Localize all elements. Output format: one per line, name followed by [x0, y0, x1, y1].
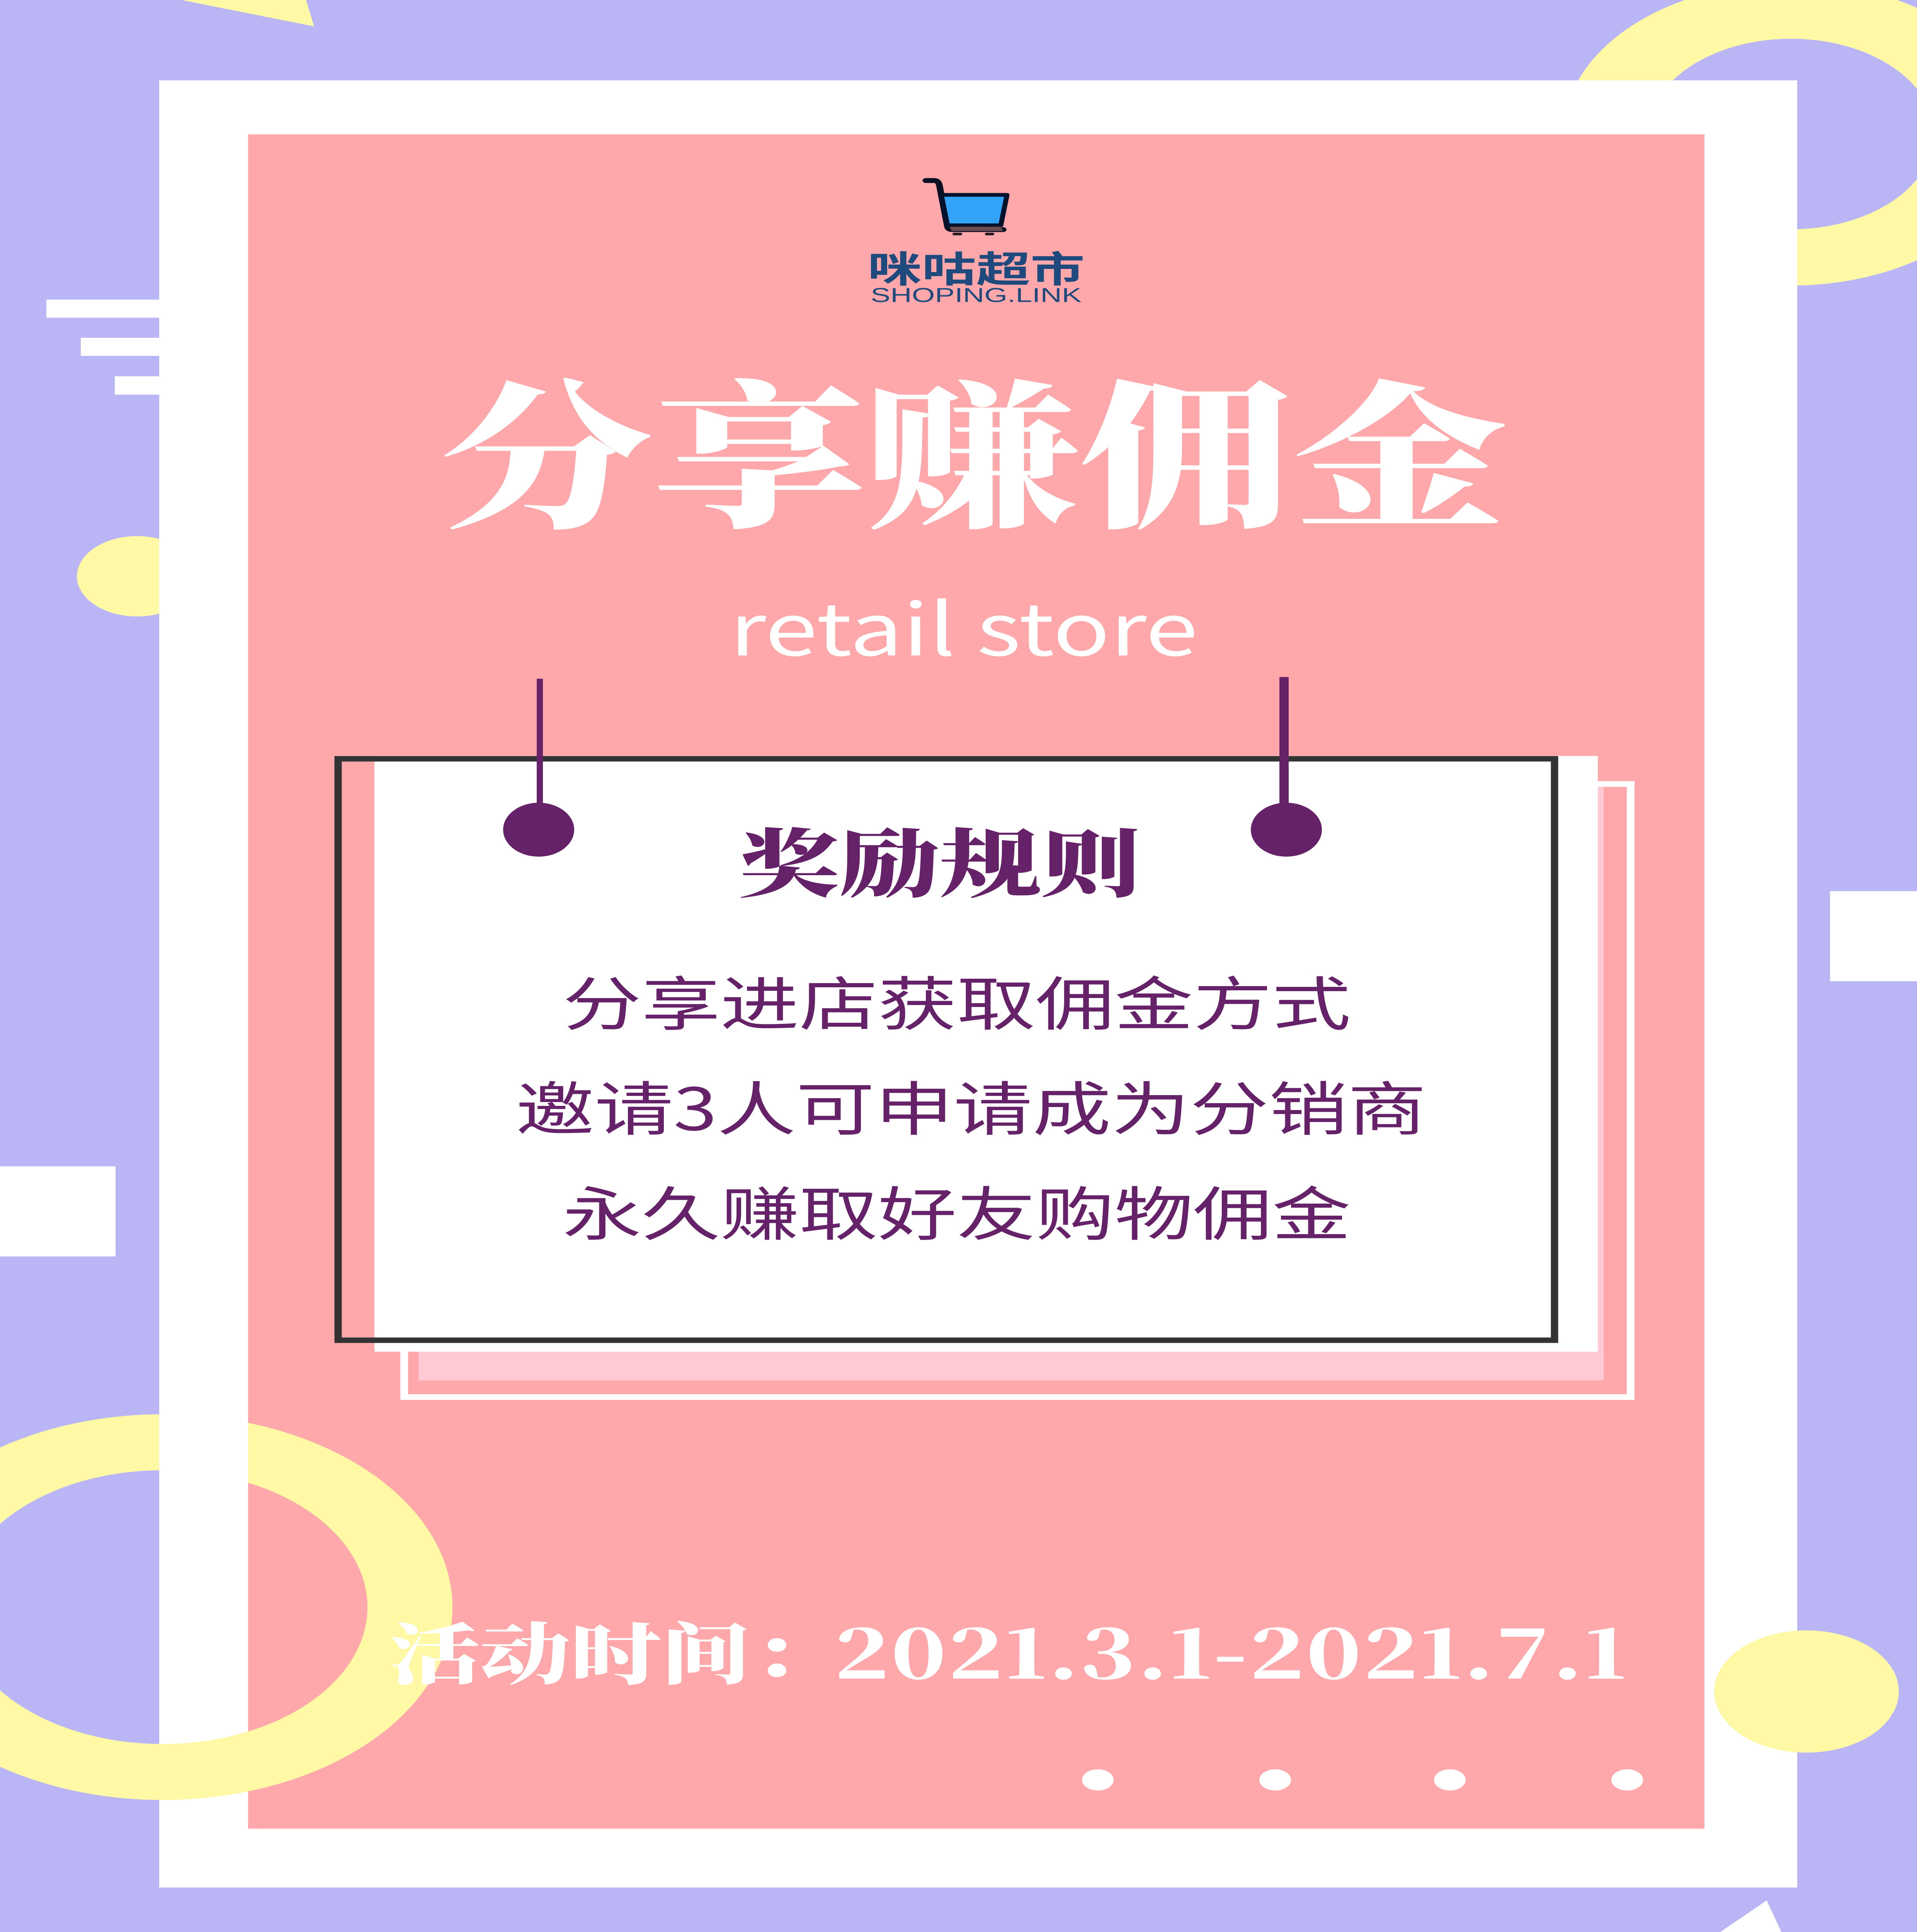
outline back frame	[404, 784, 1631, 1397]
title: 分享赚佣金	[440, 332, 1506, 560]
decoration: bottom-right white triangle	[1720, 1900, 1781, 1932]
decoration: right yellow dot	[1714, 1630, 1899, 1753]
rule line 3: 永久赚取好友购物佣金	[563, 1167, 1351, 1252]
icon: shopping cart	[926, 180, 1007, 235]
dark outline	[338, 759, 1555, 1340]
decoration: right white block	[1830, 891, 1917, 981]
panel: white frame	[159, 80, 1797, 1888]
subtitle: retail store	[730, 573, 1198, 676]
decorative dots	[1082, 1769, 1643, 1791]
decoration: left yellow dot	[77, 536, 197, 616]
logo	[867, 180, 1085, 306]
pin left	[503, 679, 574, 857]
decoration: top-right yellow ring	[1563, 0, 1917, 286]
decoration: left white block	[0, 1166, 116, 1257]
pin right	[1251, 677, 1322, 857]
decoration: left white bars	[46, 299, 162, 395]
light pink layer	[418, 787, 1604, 1380]
white sheet	[374, 756, 1598, 1352]
rule line 1: 分享进店获取佣金方式	[563, 957, 1351, 1042]
activity date: 活动时间：	[390, 1601, 842, 1698]
rule line 2: 邀请3人可申请成为分销商	[515, 1062, 1427, 1147]
card heading: 奖励规则	[739, 805, 1141, 912]
panel: rules card	[338, 677, 1631, 1397]
decoration: top-left yellow triangle	[182, 0, 314, 26]
activity date: 2021.3.1-2021.7.1	[834, 1601, 1628, 1698]
logo wordmark: 咪咕超市	[867, 240, 1085, 293]
logo url: SHOPING.LINK	[871, 284, 1082, 306]
decoration: bottom-left yellow ring	[0, 1414, 452, 1800]
panel: pink background	[248, 134, 1704, 1829]
